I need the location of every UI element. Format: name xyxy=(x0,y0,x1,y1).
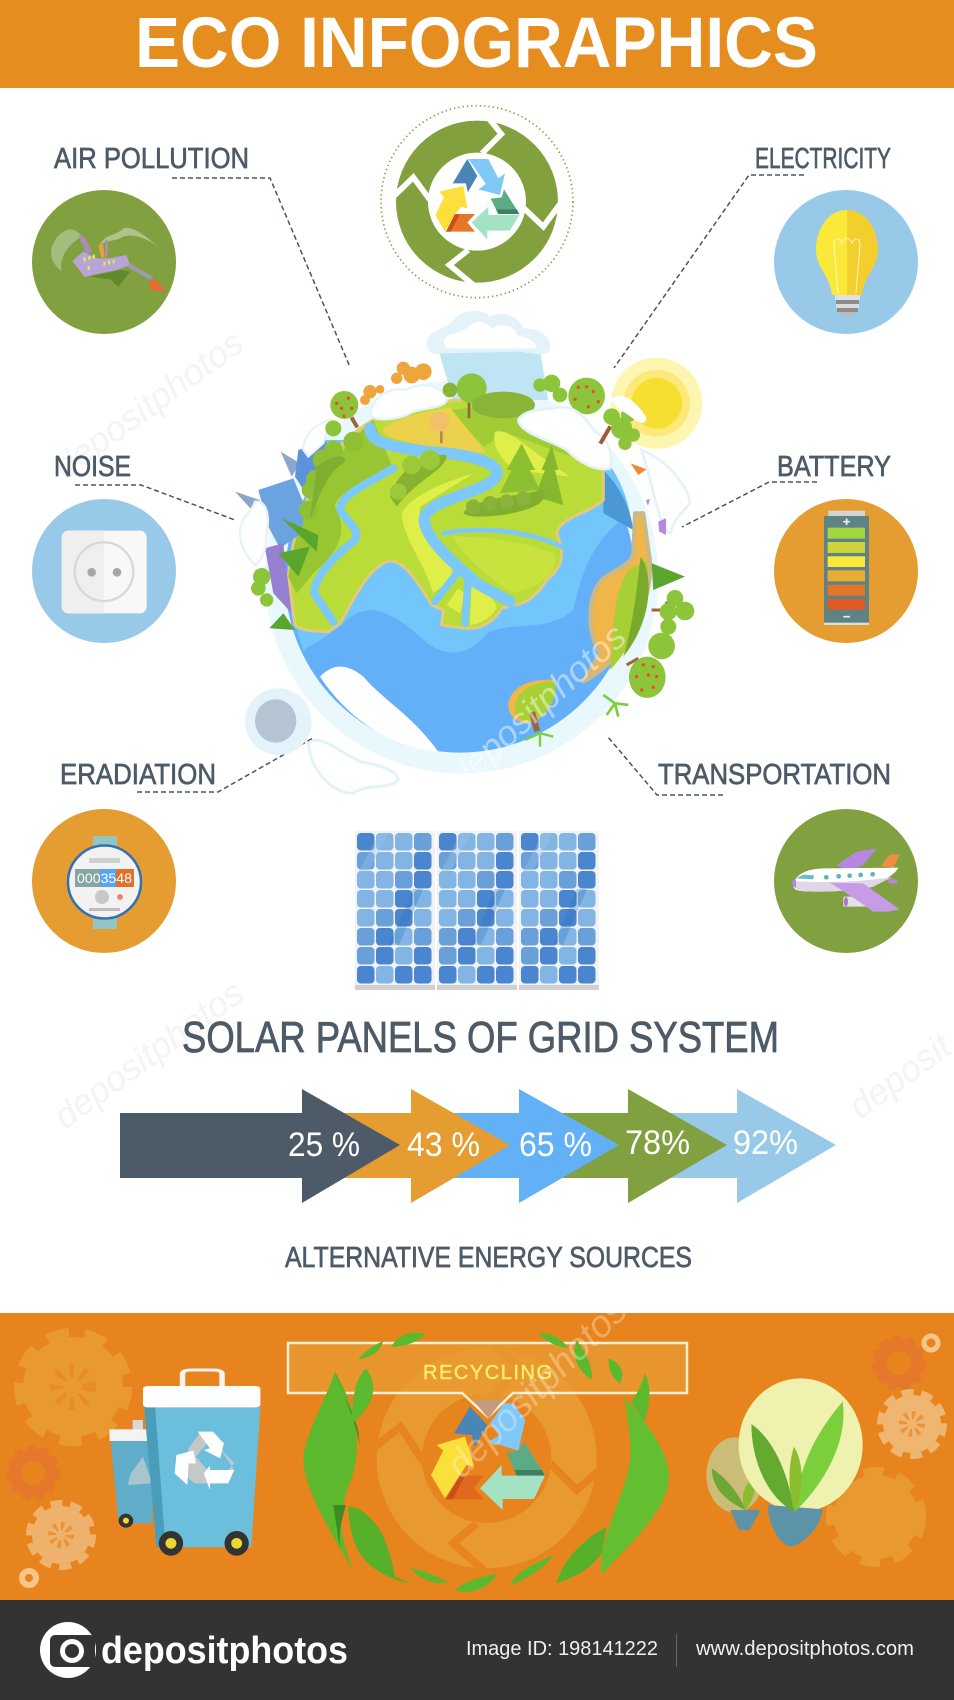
watermark over recycling band: depositphotos xyxy=(439,1289,636,1486)
watermark over globe: depositphotos xyxy=(440,615,634,796)
footer bar xyxy=(0,1600,954,1700)
arrow: 25 %: 25 % xyxy=(288,1126,360,1164)
left clouds xyxy=(240,502,268,565)
globe halo xyxy=(265,380,658,773)
label: transportation xyxy=(608,737,891,795)
label: air pollution: AIR POLLUTION xyxy=(54,143,249,175)
darker slope xyxy=(288,420,393,593)
arrow: 78% xyxy=(560,1089,727,1203)
rain cloud xyxy=(427,311,550,400)
ocean xyxy=(285,403,635,753)
gears xyxy=(8,1333,944,1585)
banner xyxy=(288,1343,687,1417)
small bulb xyxy=(706,1437,764,1530)
label: transportation: TRANSPORTATION xyxy=(658,759,891,791)
top clouds and trees xyxy=(370,373,605,443)
rivers xyxy=(314,428,562,623)
lower pale cloud xyxy=(308,740,398,793)
top-left trees xyxy=(251,362,432,607)
arrow chart xyxy=(120,1089,836,1203)
recycling band xyxy=(0,1289,954,1600)
arrow: 25 % xyxy=(120,1089,400,1203)
moon xyxy=(245,688,312,755)
icon: radiation meter: 0003548 xyxy=(77,870,132,886)
watermarks on white: depositphotos xyxy=(46,972,251,1136)
logo mark xyxy=(40,1622,96,1678)
yellow land xyxy=(383,407,487,453)
icon: light bulb xyxy=(774,190,918,334)
recycling bins xyxy=(110,1370,260,1556)
label: air pollution xyxy=(54,143,350,367)
arrow: 92% xyxy=(660,1089,836,1203)
snowy cloud xyxy=(320,667,438,752)
recycling symbol xyxy=(431,1400,545,1510)
large bulb xyxy=(739,1378,863,1547)
banner label: RECYCLING xyxy=(423,1362,552,1384)
icon: air pollution factory xyxy=(32,190,176,334)
right pale cloud and birds xyxy=(631,450,690,535)
main land with sandy coast xyxy=(288,400,603,632)
small bin xyxy=(110,1420,152,1528)
faint background ring xyxy=(375,1347,600,1570)
label: battery: BATTERY xyxy=(777,451,891,483)
label: noise: NOISE xyxy=(54,451,131,483)
label: electricity: ELECTRICITY xyxy=(755,143,891,175)
sun xyxy=(611,358,702,449)
icon: battery xyxy=(774,499,918,643)
eco bulbs xyxy=(706,1378,863,1547)
label: eradiation: ERADIATION xyxy=(60,759,216,791)
icon: airplane xyxy=(774,809,918,953)
icon: power socket xyxy=(32,499,176,643)
arrow: 78%: 78% xyxy=(625,1124,690,1162)
right side trees xyxy=(525,563,694,747)
recycling emblem xyxy=(381,106,573,298)
website: www.depositphotos.com xyxy=(695,1638,914,1660)
arrow: 65 % xyxy=(450,1089,619,1203)
heading: solar panels: SOLAR PANELS OF GRID SYSTEM xyxy=(182,1013,779,1062)
header band xyxy=(0,0,954,88)
large bin xyxy=(143,1370,260,1556)
arrow: 43 % xyxy=(340,1089,510,1203)
label: battery xyxy=(682,451,891,527)
label: noise xyxy=(54,451,235,520)
label: electricity xyxy=(614,143,891,368)
arrow: 92%: 92% xyxy=(733,1124,798,1162)
caption: alternative energy sources: ALTERNATIVE ENERGY SOURCES xyxy=(285,1242,692,1274)
right tree by sun xyxy=(599,396,647,450)
leaf wreath xyxy=(303,1333,669,1592)
large cloud on land xyxy=(518,407,611,469)
icon: radiation meter xyxy=(32,809,176,953)
arrow: 65 %: 65 % xyxy=(519,1126,592,1164)
title: ECO INFOGRAPHICS xyxy=(135,4,818,83)
small island xyxy=(508,680,556,732)
logo wordmark: depositphotos xyxy=(101,1630,348,1672)
mountains xyxy=(235,442,327,613)
right landmass xyxy=(583,513,650,682)
image id: Image ID: 198141222 xyxy=(466,1638,658,1660)
watermarks on white: depositphotos xyxy=(46,322,251,486)
label: eradiation xyxy=(60,738,313,792)
watermarks on white xyxy=(46,322,954,1136)
forest trees xyxy=(269,432,563,630)
arrow: 43 %: 43 % xyxy=(407,1126,480,1164)
globe illustration xyxy=(235,311,702,793)
solar panels xyxy=(355,831,599,990)
